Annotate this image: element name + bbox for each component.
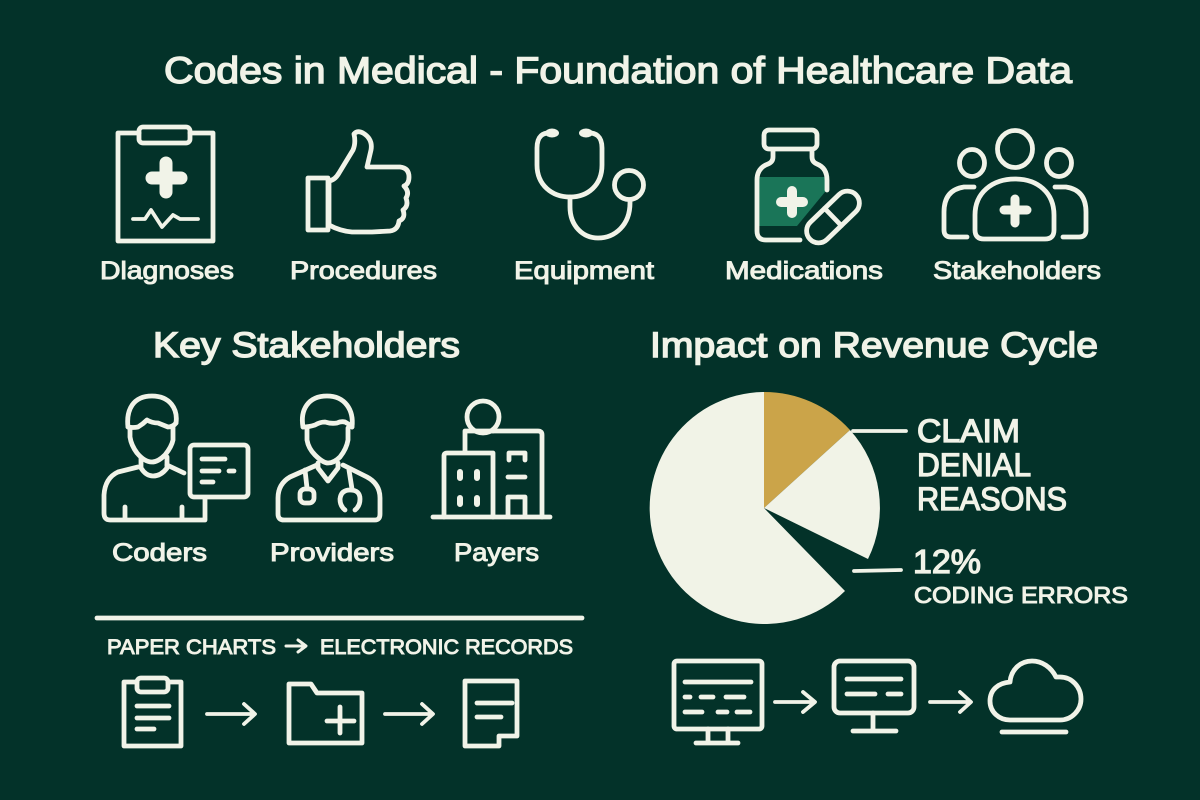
divider line (97, 616, 582, 620)
pie chart: claim denial reasons (650, 392, 880, 624)
slice: medium share (764, 430, 880, 559)
icon: digital document (465, 681, 517, 746)
icon: cloud (990, 661, 1081, 732)
label: procedures: Procedures (290, 257, 437, 285)
panel: impact on revenue cycle (650, 326, 1128, 624)
callout: coding errors 12% (913, 543, 1128, 608)
label: diagnoses: Dlagnoses (100, 257, 234, 285)
title: Codes in Medical - Foundation of Healthcare Data (164, 50, 1072, 91)
callout: claim denial reasons: DENIAL (917, 447, 1031, 483)
label: paper charts to electronic records: ELECTRONIC RECORDS (320, 635, 573, 659)
arrow (385, 704, 433, 724)
label: coders: Coders (112, 539, 207, 567)
panel: digital workflow (674, 661, 1081, 743)
label: medications: Medications (725, 257, 883, 285)
label: payers: Payers (454, 539, 539, 567)
icon: stakeholders group (944, 130, 1086, 239)
callout: coding errors 12%: 12% (913, 543, 981, 580)
heading: impact on revenue cycle: Impact on Revenue Cycle (650, 326, 1098, 365)
label: equipment: Equipment (514, 257, 654, 285)
icon: payers buildings (433, 401, 550, 517)
label: paper charts to electronic records: PAPER CHARTS (107, 635, 276, 659)
slice: gold share (764, 392, 850, 508)
callout: coding errors 12%: CODING ERRORS (914, 582, 1128, 608)
icon: provider with stethoscope (278, 396, 380, 520)
icon: medications bottle and pill (757, 130, 871, 254)
icon: coder with chart (104, 396, 248, 520)
panel: paper to electronic records (97, 618, 582, 746)
arrow (775, 692, 815, 712)
slice: large share (650, 392, 845, 624)
leader line: coding errors (854, 570, 901, 571)
callout: claim denial reasons: CLAIM (917, 413, 1020, 449)
panel: key stakeholders (104, 326, 550, 567)
heading: key stakeholders: Key Stakeholders (153, 326, 460, 365)
callout: claim denial reasons (917, 413, 1067, 517)
leader line: claim denial (853, 429, 906, 433)
icon: computer screen (834, 661, 914, 731)
icon: equipment stethoscope (537, 128, 644, 238)
label: providers: Providers (270, 539, 394, 567)
callout: claim denial reasons: REASONS (917, 481, 1067, 517)
arrow (930, 692, 971, 712)
icon: monitor with data (674, 661, 762, 743)
icon: medical folder (289, 684, 362, 743)
icon: procedures thumbs up (308, 132, 409, 232)
label: paper charts to electronic records (107, 635, 573, 659)
icon: paper clipboard (124, 678, 181, 746)
icon: diagnoses clipboard (118, 127, 213, 241)
arrow (207, 704, 255, 724)
panel: code categories (100, 127, 1101, 285)
label: stakeholders: Stakeholders (933, 257, 1101, 285)
